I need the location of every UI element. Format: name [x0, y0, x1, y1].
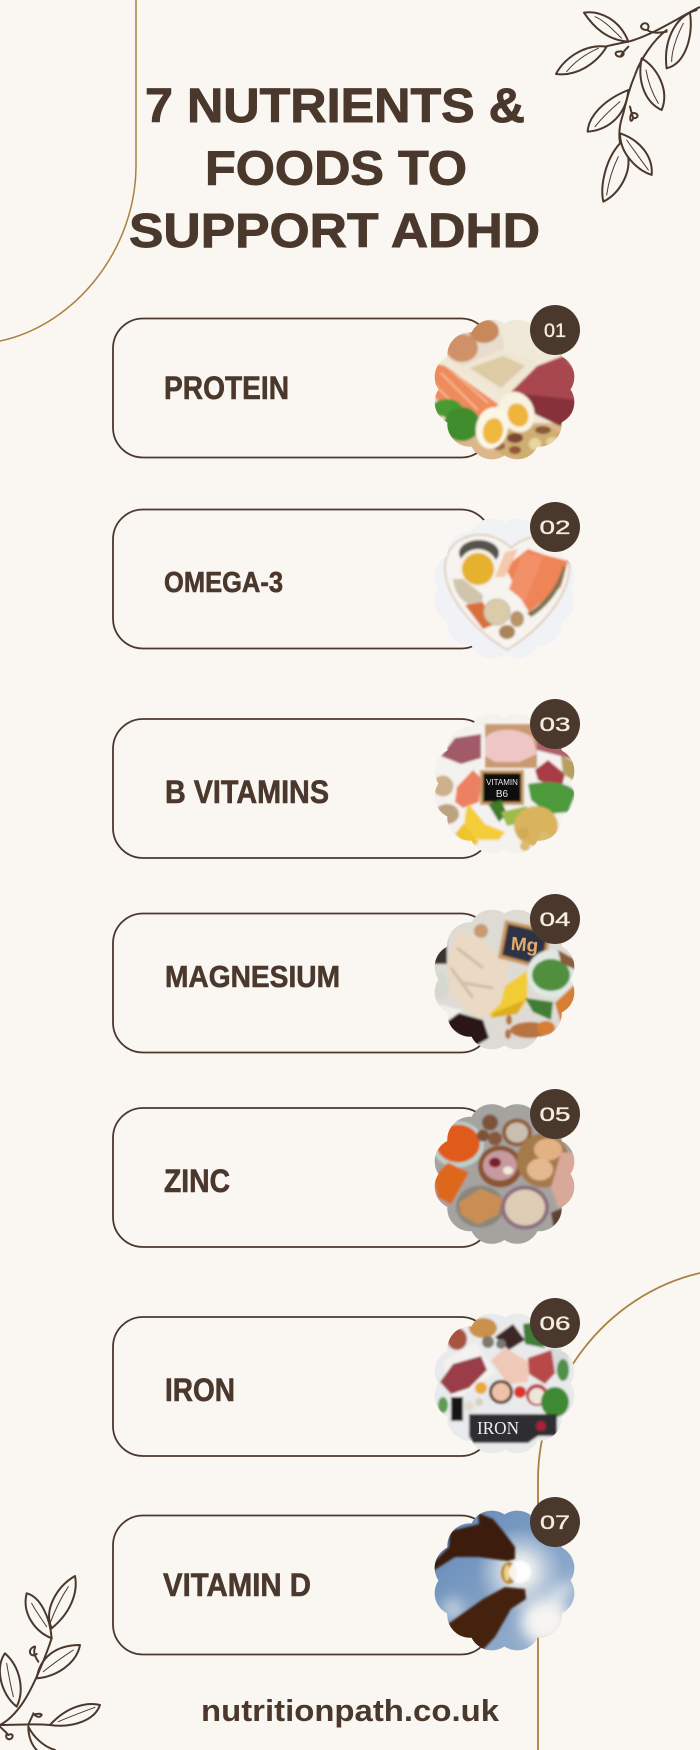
- label: omega-3: OMEGA-3: [164, 567, 283, 599]
- label: iron: IRON: [165, 1372, 235, 1408]
- badge: 06: 06: [540, 1314, 570, 1335]
- title: SUPPORT ADHD: [129, 205, 540, 258]
- panel: 06 iron: [113, 1298, 580, 1456]
- label: protein: PROTEIN: [164, 370, 289, 406]
- title: FOODS TO: [205, 142, 467, 196]
- decorative curve: bottom right: [538, 1273, 700, 1750]
- photo: zinc foods: [432, 1102, 576, 1246]
- badge: 05: [530, 1089, 580, 1139]
- label: magnesium: MAGNESIUM: [165, 959, 340, 994]
- photo: vitamin d capsule in sunlight: [433, 1509, 578, 1652]
- panel: 07 vitamin d: [113, 1497, 580, 1654]
- photo: magnesium foods: [429, 908, 576, 1051]
- title: [129, 80, 540, 258]
- label: b vitamins: B VITAMINS: [165, 774, 329, 810]
- badge: 02: [530, 502, 580, 552]
- badge: 06: [530, 1298, 580, 1348]
- badge: 01: [530, 305, 580, 355]
- photo: protein foods: [432, 313, 576, 461]
- decorative curve: top left: [0, 0, 136, 341]
- sign text: vitamin b6: [486, 779, 518, 797]
- panel: 03 b vitamins: [113, 699, 580, 858]
- badge: 03: [530, 699, 580, 749]
- photo: omega-3 heart plate: [433, 517, 576, 660]
- badge: 01: 01: [544, 321, 566, 342]
- sign text: iron: IRON: [477, 1418, 519, 1438]
- badge: 02: 02: [540, 518, 570, 539]
- badge: 07: [530, 1497, 580, 1547]
- panel: 02 omega-3: [113, 502, 580, 660]
- badge: 05: 05: [540, 1105, 570, 1126]
- sign text: vitamin b6: VITAMIN: [486, 778, 518, 787]
- icon: leaf branch bottom left: [0, 1576, 100, 1750]
- sign text: vitamin b6: B6: [496, 789, 509, 800]
- title: 7 NUTRIENTS &: [145, 80, 525, 133]
- photo: iron foods: [433, 1312, 576, 1455]
- badge: 07: 07: [540, 1513, 570, 1534]
- label: vitamin d: VITAMIN D: [163, 1567, 311, 1603]
- label: zinc: ZINC: [164, 1163, 230, 1199]
- panel: 01 protein: [113, 305, 580, 461]
- badge: 04: 04: [540, 910, 571, 931]
- panel: 05 zinc: [113, 1089, 580, 1247]
- footer website: nutritionpath.co.uk: [201, 1693, 500, 1728]
- panel: 04 magnesium: [113, 894, 580, 1052]
- sign text: Mg: Mg: [510, 934, 539, 957]
- badge: 04: [530, 894, 580, 944]
- icon: leaf branch top right: [556, 7, 699, 202]
- photo: vitamin b foods: [435, 721, 574, 852]
- badge: 03: 03: [540, 715, 570, 736]
